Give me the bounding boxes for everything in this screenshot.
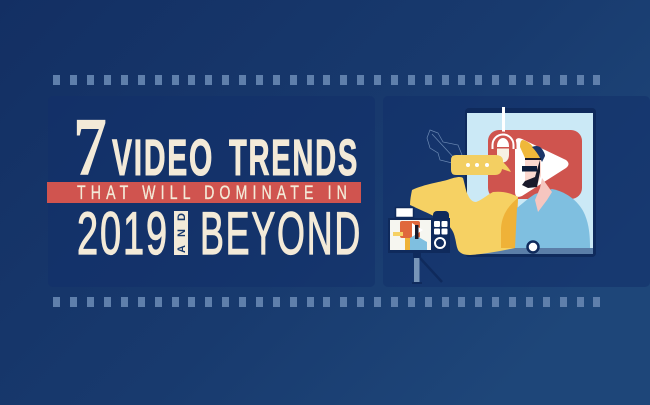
microphone (490, 107, 516, 163)
film frame: right panel (383, 96, 650, 287)
monitor button (528, 242, 538, 252)
title: 2019: 2019 (77, 200, 169, 267)
presenter: arm shade (501, 198, 518, 248)
camera body (388, 218, 450, 253)
presenter: shirt (515, 189, 590, 248)
presenter (501, 140, 590, 248)
banner text: THAT WILL DOMINATE IN (77, 182, 352, 204)
presenter: beard (522, 160, 540, 188)
speech bubble (451, 155, 511, 175)
illustration (388, 107, 596, 284)
presenter: hair band (525, 158, 541, 160)
camera screen (390, 220, 431, 250)
presenter: cap (520, 140, 540, 159)
leaf outline (427, 130, 462, 163)
camera buttons (434, 221, 448, 234)
presenter: face (525, 158, 541, 186)
camera dial (435, 238, 445, 248)
title: trends: TRENDS (229, 129, 359, 186)
title: video: VIDEO (112, 129, 214, 186)
camera viewfinder (396, 208, 414, 218)
video play card (488, 130, 582, 199)
monitor (465, 108, 596, 257)
title: beyond: BEYOND (200, 200, 362, 267)
camera on tripod (388, 208, 450, 284)
title: numeral 7: 7 (73, 101, 107, 194)
red banner (47, 182, 361, 203)
film strip: bottom sprocket holes (53, 297, 600, 307)
film strip: top sprocket holes (53, 75, 600, 85)
presenter: sunglasses (522, 166, 537, 172)
and badge: AND (176, 213, 188, 253)
presenter: neck (535, 178, 552, 212)
film frame: left panel (48, 96, 375, 287)
tripod (414, 258, 420, 282)
yellow blob (410, 177, 518, 255)
title (47, 101, 362, 267)
